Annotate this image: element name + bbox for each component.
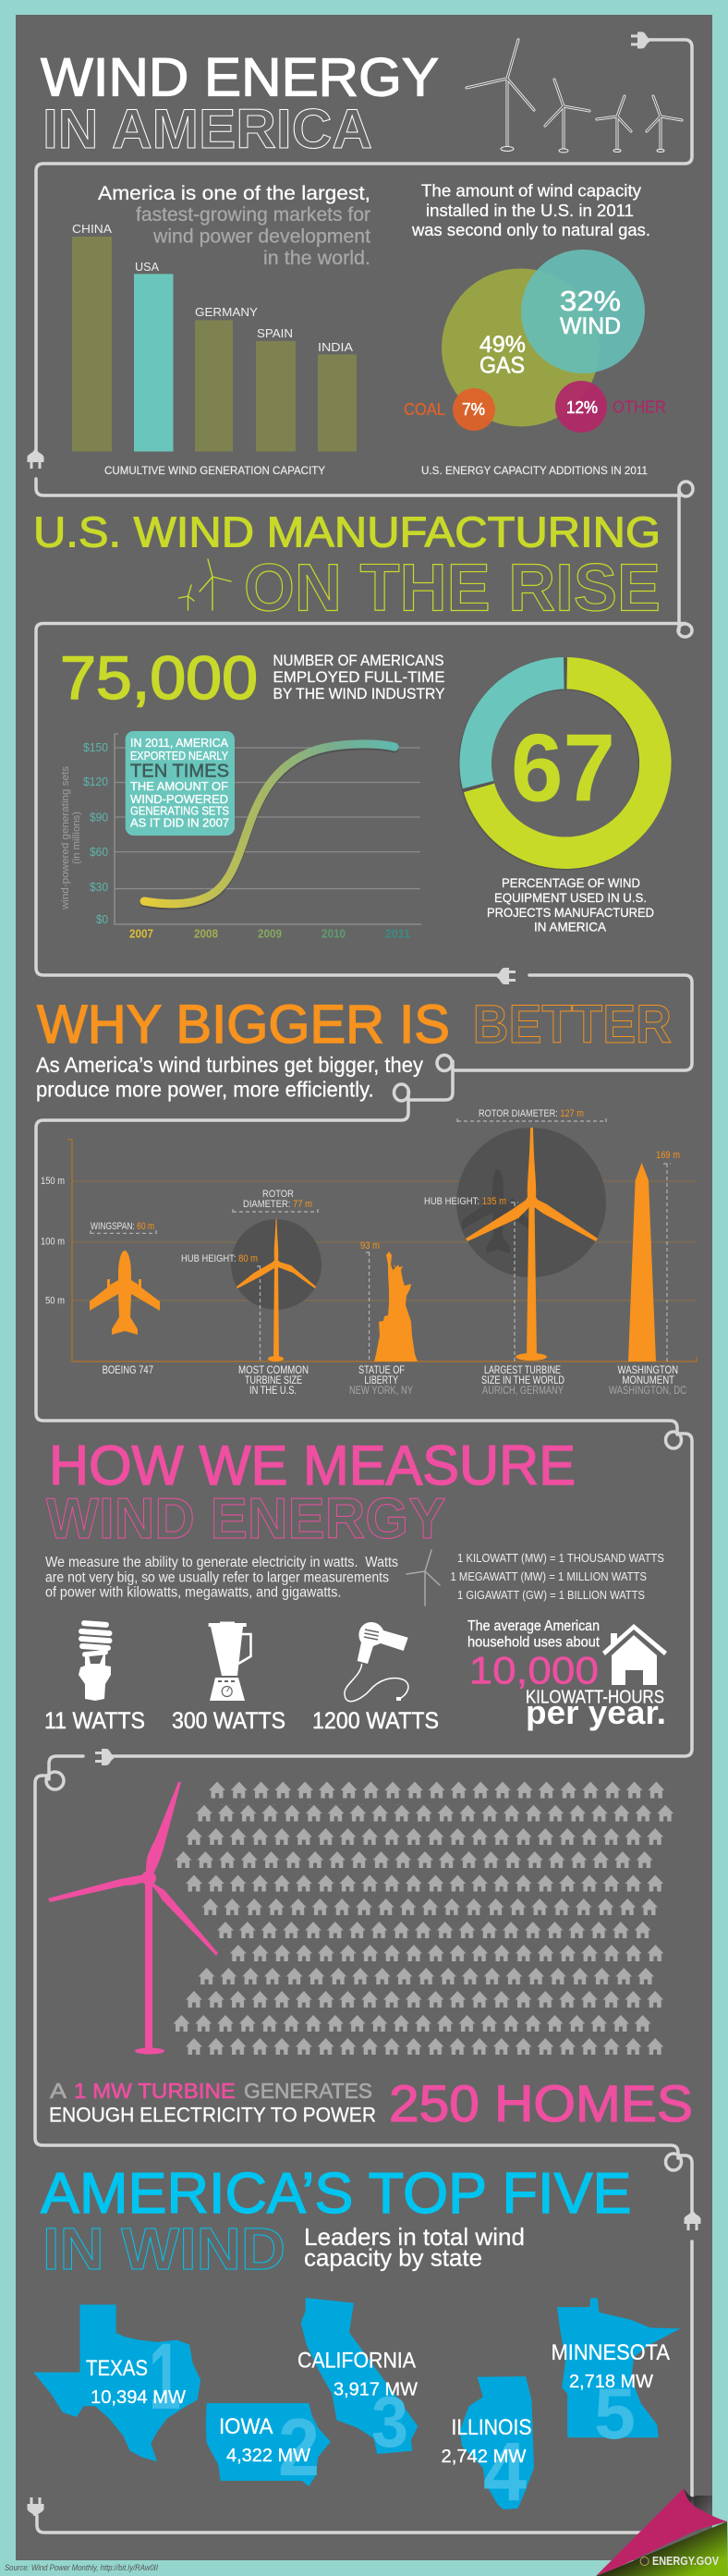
donut chart: 67 percent bbox=[475, 673, 655, 934]
chart item labels: LIBERTY bbox=[364, 1373, 398, 1386]
state names and capacities: TEXAS bbox=[86, 2356, 148, 2381]
state rank numbers: 5 bbox=[594, 2373, 636, 2454]
stat: 75,000 employed: 75,000 bbox=[60, 643, 258, 712]
unit definitions: 1 GIGAWATT (GW) = 1 BILLION WATTS bbox=[457, 1589, 645, 1602]
icon: Statue of Liberty bbox=[360, 1240, 418, 1361]
callout: average household usage: per year. bbox=[526, 1693, 666, 1731]
donut chart: 67 percent: EQUIPMENT USED IN U.S. bbox=[494, 890, 647, 905]
text: measuring electricity in watts: of power with kilowatts, megawatts, and gigawatts. bbox=[45, 1584, 341, 1600]
callout: ten times: AS IT DID IN 2007 bbox=[130, 816, 229, 830]
donut chart: 67 percent: IN AMERICA bbox=[534, 920, 607, 934]
state rank numbers: 4 bbox=[483, 2426, 527, 2519]
chart item labels: MOST COMMON bbox=[238, 1363, 309, 1376]
donut chart: 67 percent: PERCENTAGE OF WIND bbox=[502, 875, 640, 890]
icon: large pink turbine bbox=[48, 1782, 218, 2054]
icon: light bulb bbox=[79, 1620, 113, 1701]
icon: most common turbine: DIAMETER: 77 m bbox=[243, 1199, 312, 1210]
text: 1 MW turbine powers 250 homes: 250 HOMES bbox=[389, 2074, 693, 2132]
bubble chart: energy capacity additions: 7% bbox=[462, 400, 485, 419]
heading: America's top five in wind: IN WIND bbox=[42, 2216, 285, 2282]
unit definitions: 1 KILOWATT (MW) = 1 THOUSAND WATTS bbox=[457, 1552, 664, 1565]
line chart: exports of wind-powered generating sets: 2009 bbox=[258, 927, 282, 941]
text: America is one of the largest bbox=[98, 183, 370, 269]
text: America is one of the largest: fastest-growing markets for bbox=[136, 204, 370, 226]
heading: why bigger is better: WHY BIGGER IS bbox=[37, 995, 450, 1055]
title: IN AMERICA bbox=[42, 98, 372, 160]
icon: Boeing 747: WINGSPAN: 60 m bbox=[91, 1221, 154, 1232]
heading: how we measure wind energy: WIND ENERGY bbox=[46, 1487, 445, 1551]
icon grid: 250 homes bbox=[174, 1782, 679, 2055]
page curl corner with energy.gov logo bbox=[596, 2488, 728, 2576]
chart item labels: WASHINGTON, DC bbox=[609, 1384, 686, 1397]
line chart: exports of wind-powered generating sets: $150 bbox=[83, 740, 108, 754]
text: measuring electricity in watts bbox=[45, 1555, 398, 1600]
callout: average household usage: KILOWATT-HOURS bbox=[526, 1688, 664, 1708]
bubble chart: energy capacity additions: U.S. ENERGY CAPACITY ADDITIONS IN 2011 bbox=[421, 464, 648, 477]
bubble chart: energy capacity additions: 32% bbox=[560, 285, 621, 317]
text: 1 MW turbine powers 250 homes bbox=[49, 2074, 693, 2132]
chart item labels: IN THE U.S. bbox=[249, 1384, 297, 1397]
watt labels bbox=[44, 1708, 439, 1734]
bar chart: cumulative wind generation capacity: INDIA bbox=[318, 340, 353, 354]
icon: largest turbine bbox=[424, 1108, 606, 1361]
size comparison chart bbox=[41, 1108, 697, 1397]
chart item labels: MONUMENT bbox=[623, 1373, 675, 1386]
callout: ten times: TEN TIMES bbox=[130, 762, 229, 782]
state names and capacities: 3,917 MW bbox=[334, 2380, 418, 2400]
callout: ten times: THE AMOUNT OF bbox=[130, 779, 228, 793]
stat: 75,000 employed: NUMBER OF AMERICANS bbox=[273, 653, 443, 669]
line chart: exports of wind-powered generating sets: (in millions) bbox=[71, 812, 82, 864]
title bbox=[41, 48, 439, 160]
chart item labels: TURBINE SIZE bbox=[245, 1373, 302, 1386]
size comparison chart: 150 m bbox=[41, 1176, 65, 1187]
heading: U.S. wind manufacturing on the rise: U.S. WIND MANUFACTURING bbox=[33, 508, 661, 556]
callout: ten times: WIND-POWERED bbox=[130, 792, 228, 806]
line chart: exports of wind-powered generating sets: wind-powered generating sets bbox=[60, 765, 71, 910]
icon: blender bbox=[209, 1621, 251, 1701]
callout: average household usage: The average American bbox=[467, 1618, 600, 1634]
heading: why bigger is better bbox=[37, 995, 672, 1055]
stat: 75,000 employed: BY THE WIND INDUSTRY bbox=[273, 686, 445, 702]
line chart: exports of wind-powered generating sets: $90 bbox=[90, 810, 108, 824]
state names and capacities: 2,718 MW bbox=[569, 2372, 653, 2392]
heading: America's top five in wind bbox=[41, 2162, 631, 2282]
icon: most common turbine: ROTOR bbox=[262, 1189, 294, 1200]
line chart: exports of wind-powered generating sets: 2007 bbox=[129, 927, 153, 941]
size comparison chart: 100 m bbox=[41, 1237, 65, 1248]
bar chart: cumulative wind generation capacity: USA bbox=[135, 260, 159, 274]
state names and capacities: CALIFORNIA bbox=[297, 2349, 416, 2374]
watt labels: 1200 WATTS bbox=[312, 1708, 439, 1734]
state names and capacities bbox=[86, 2340, 670, 2467]
chart item labels bbox=[103, 1363, 686, 1397]
state rank numbers: 3 bbox=[371, 2381, 408, 2462]
text: bigger turbines subtitle: produce more power, more efficiently. bbox=[36, 1078, 374, 1102]
bubble chart: energy capacity additions: WIND bbox=[560, 313, 621, 339]
text: bigger turbines subtitle: As America’s wind turbines get bigger, they bbox=[36, 1053, 423, 1077]
state names and capacities: 4,322 MW bbox=[226, 2446, 310, 2466]
callout: ten times bbox=[126, 731, 235, 836]
text: amount of wind capacity: was second only to natural gas. bbox=[411, 221, 650, 239]
state names and capacities: IOWA bbox=[219, 2414, 273, 2439]
state rank numbers: 1 bbox=[149, 2324, 181, 2429]
icon: grey turbine bbox=[406, 1550, 440, 1605]
line chart: exports of wind-powered generating sets: 2008 bbox=[194, 927, 218, 941]
line chart: exports of wind-powered generating sets: 2010 bbox=[322, 927, 346, 941]
icon: largest turbine: ROTOR DIAMETER: 127 m bbox=[479, 1108, 584, 1119]
bar chart: cumulative wind generation capacity: SPAIN bbox=[257, 326, 293, 340]
icon: Statue of Liberty: 93 m bbox=[360, 1240, 380, 1251]
bar chart: cumulative wind generation capacity: CHINA bbox=[72, 222, 112, 236]
chart item labels: WASHINGTON bbox=[617, 1363, 678, 1376]
donut chart: 67 percent: 67 bbox=[511, 715, 615, 823]
icon: hair dryer bbox=[345, 1622, 408, 1702]
text: measuring electricity in watts: are not very big, so we usually refer to larger measurements bbox=[45, 1570, 389, 1586]
text: 1 MW turbine powers 250 homes: 1 MW TURBINE bbox=[74, 2079, 236, 2103]
state maps bbox=[33, 2298, 680, 2509]
line chart: exports of wind-powered generating sets: $60 bbox=[90, 845, 108, 859]
icon: Washington Monument: 169 m bbox=[656, 1150, 680, 1161]
bubble chart: energy capacity additions: 49% bbox=[479, 332, 526, 358]
text: America is one of the largest: wind power development bbox=[152, 226, 370, 248]
icon: Washington Monument bbox=[628, 1150, 680, 1361]
text: leaders by state: Leaders in total wind bbox=[304, 2223, 525, 2251]
state names and capacities: ILLINOIS bbox=[451, 2415, 532, 2440]
bar chart: cumulative wind generation capacity: CUMULTIVE WIND GENERATION CAPACITY bbox=[104, 464, 325, 477]
size comparison chart: 50 m bbox=[45, 1296, 65, 1307]
callout: ten times: GENERATING SETS bbox=[130, 804, 229, 818]
icon: two small green turbines bbox=[179, 559, 231, 610]
source note: Source: Wind Power Monthly, http://bit.ly/RAw0II bbox=[5, 2563, 158, 2573]
heading: U.S. wind manufacturing on the rise: ON THE RISE bbox=[244, 551, 661, 625]
heading: why bigger is better: BETTER bbox=[473, 995, 672, 1055]
unit definitions bbox=[451, 1552, 664, 1602]
bar chart: cumulative wind generation capacity bbox=[72, 222, 357, 477]
callout: average household usage: 10,000 bbox=[469, 1649, 599, 1692]
state names and capacities: MINNESOTA bbox=[552, 2340, 670, 2365]
bubble chart: energy capacity additions bbox=[404, 250, 666, 477]
line chart: exports of wind-powered generating sets: $120 bbox=[83, 775, 108, 788]
bar chart: cumulative wind generation capacity: GERMANY bbox=[195, 305, 258, 319]
text: 1 MW turbine powers 250 homes: ENOUGH ELECTRICITY TO POWER bbox=[49, 2104, 376, 2127]
line chart: exports of wind-powered generating sets bbox=[60, 734, 421, 941]
donut chart: 67 percent: PROJECTS MANUFACTURED bbox=[487, 905, 654, 920]
text: amount of wind capacity: The amount of wind capacity bbox=[421, 181, 641, 200]
bubble chart: energy capacity additions: 12% bbox=[566, 398, 598, 417]
stat: 75,000 employed: EMPLOYED FULL-TIME bbox=[273, 669, 445, 686]
text: leaders by state bbox=[304, 2223, 525, 2272]
icon: largest turbine: HUB HEIGHT: 135 m bbox=[424, 1196, 506, 1207]
bubble chart: energy capacity additions: COAL bbox=[404, 400, 445, 419]
icon: Boeing 747 bbox=[90, 1221, 160, 1335]
watt labels: 11 WATTS bbox=[44, 1708, 145, 1734]
state rank numbers: 2 bbox=[278, 2401, 320, 2493]
text: leaders by state: capacity by state bbox=[304, 2244, 482, 2272]
state rank numbers bbox=[149, 2324, 636, 2519]
text: bigger turbines subtitle bbox=[36, 1053, 423, 1102]
bubble chart: energy capacity additions: OTHER bbox=[613, 397, 666, 416]
chart item labels: NEW YORK, NY bbox=[349, 1384, 413, 1397]
text: 1 MW turbine powers 250 homes: A bbox=[50, 2079, 67, 2103]
heading: U.S. wind manufacturing on the rise bbox=[33, 508, 661, 625]
chart item labels: AURICH, GERMANY bbox=[482, 1384, 564, 1397]
text: America is one of the largest: in the world. bbox=[263, 248, 370, 269]
line chart: exports of wind-powered generating sets: $0 bbox=[96, 912, 108, 926]
watt labels: 300 WATTS bbox=[172, 1708, 285, 1734]
chart item labels: STATUE OF bbox=[358, 1363, 405, 1376]
text: 1 MW turbine powers 250 homes: GENERATES bbox=[244, 2079, 372, 2103]
text: amount of wind capacity: installed in the U.S. in 2011 bbox=[426, 201, 634, 220]
callout: average household usage bbox=[467, 1618, 667, 1731]
bubble chart: energy capacity additions: GAS bbox=[479, 353, 525, 379]
heading: how we measure wind energy bbox=[46, 1435, 576, 1551]
callout: ten times: IN 2011, AMERICA bbox=[130, 736, 228, 750]
text: America is one of the largest: America is one of the largest, bbox=[98, 183, 370, 204]
text: measuring electricity in watts: We measure the ability to generate electricity in watts. Watts bbox=[45, 1555, 398, 1570]
title: WIND ENERGY bbox=[41, 48, 439, 107]
chart item labels: SIZE IN THE WORLD bbox=[481, 1373, 564, 1386]
heading: America's top five in wind: AMERICA’S TOP FIVE bbox=[41, 2162, 631, 2226]
stat: 75,000 employed bbox=[60, 643, 445, 712]
line chart: exports of wind-powered generating sets: $30 bbox=[90, 880, 108, 894]
chart item labels: BOEING 747 bbox=[103, 1363, 153, 1376]
text: amount of wind capacity bbox=[411, 181, 650, 239]
callout: average household usage: household uses about bbox=[467, 1635, 601, 1651]
callout: ten times: EXPORTED NEARLY bbox=[130, 749, 228, 763]
chart item labels: LARGEST TURBINE bbox=[484, 1363, 561, 1376]
icon: most common turbine bbox=[181, 1189, 322, 1361]
heading: how we measure wind energy: HOW WE MEASURE bbox=[49, 1435, 576, 1496]
line chart: exports of wind-powered generating sets: 2011 bbox=[385, 927, 410, 941]
icon: most common turbine: HUB HEIGHT: 80 m bbox=[181, 1253, 258, 1264]
state names and capacities: 2,742 MW bbox=[442, 2447, 527, 2467]
state names and capacities: 10,394 MW bbox=[91, 2387, 186, 2408]
icon: four line-art wind turbines bbox=[467, 40, 682, 153]
unit definitions: 1 MEGAWATT (MW) = 1 MILLION WATTS bbox=[451, 1570, 647, 1583]
